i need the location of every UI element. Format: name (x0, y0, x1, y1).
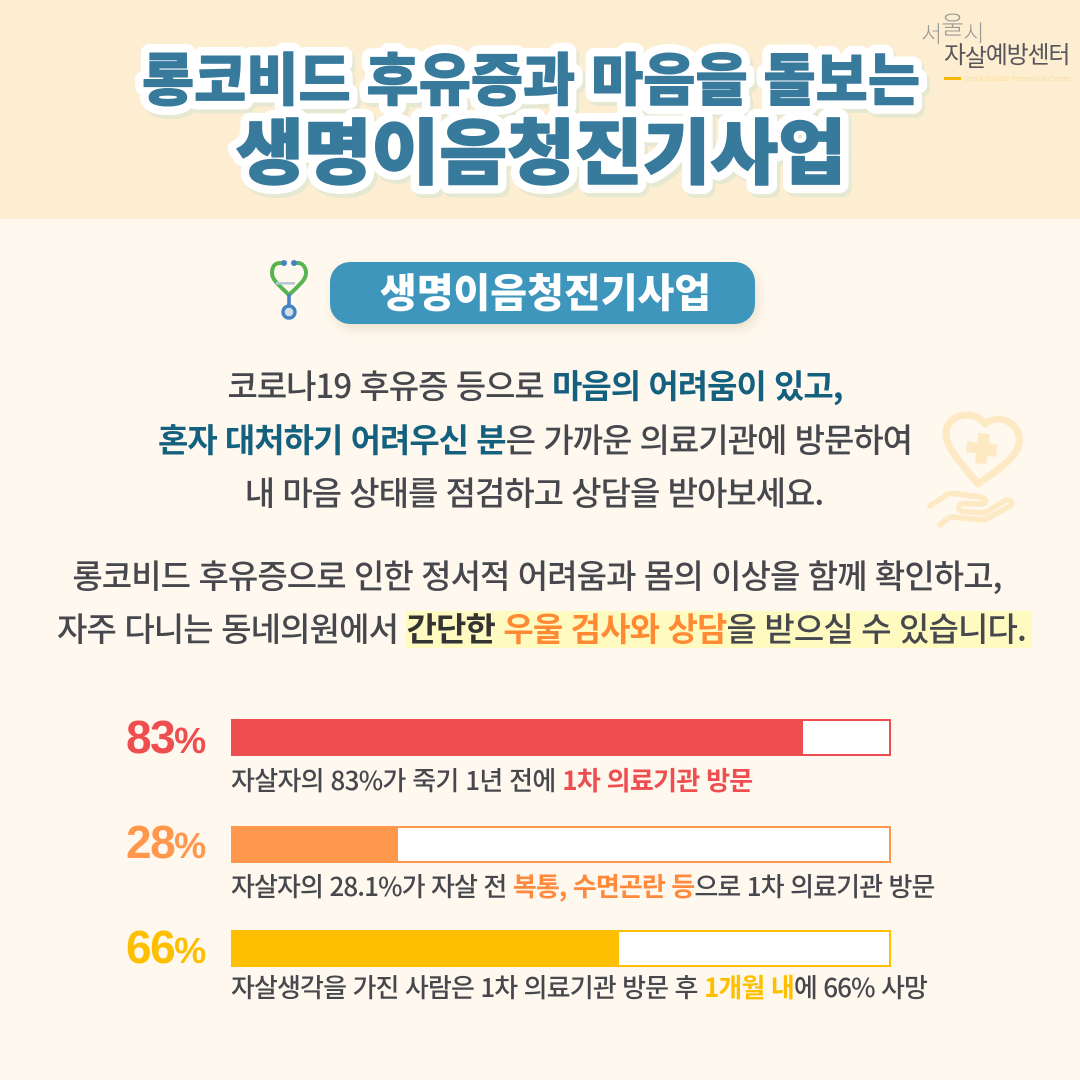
title: 생명이음청진기사업 (236, 97, 846, 199)
bar 28% (231, 826, 891, 863)
caption 83%: 자살자의 83%가 죽기 1년 전에 1차 의료기관 방문 (231, 761, 753, 798)
title: 롱코비드 후유증과 마음을 돌보는 (142, 35, 920, 117)
caption 66%: 자살생각을 가진 사람은 1차 의료기관 방문 후 1개월 내에 66% 사망 (231, 968, 927, 1005)
title: 롱코비드 후유증과 마음을 돌보는 (145, 39, 923, 121)
stat 83% (126, 711, 891, 798)
caption 28%: 자살자의 28.1%가 자살 전 복통, 수면곤란 등으로 1차 의료기관 방문 (231, 867, 935, 904)
paragraph 1 line 3: 내 마음 상태를 점검하고 상담을 받아보세요. (245, 467, 823, 515)
stat 66% (126, 921, 928, 1005)
section heading pill (330, 262, 755, 324)
logo: Seoul Suicide Prevention Center: 자살예방센터 (944, 35, 1069, 73)
value 66%: 66% (126, 921, 206, 973)
paragraph 2 line 1: 롱코비드 후유증으로 인한 정서적 어려움과 몸의 이상을 함께 확인하고, (72, 550, 1002, 598)
paragraph 1 line 1: 코로나19 후유증 등으로 마음의 어려움이 있고, (227, 360, 843, 408)
value 83%: 83% (126, 711, 206, 763)
title: 생명이음청진기사업 (236, 97, 846, 199)
logo: Seoul Suicide Prevention Center: Seoul Suicide Prevention Center (964, 74, 1071, 83)
title: 롱코비드 후유증과 마음을 돌보는 (142, 35, 920, 117)
bar 83% (231, 719, 891, 756)
header band (0, 0, 1080, 219)
icon: heart with cross over hand (927, 412, 1023, 528)
paragraph 2 line 2: 자주 다니는 동네의원에서 간단한 우울 검사와 상담을 받으실 수 있습니다. (57, 603, 1026, 651)
icon: stethoscope (270, 260, 308, 320)
logo: Seoul Suicide Prevention Center: 서울시 (921, 6, 983, 49)
value 28%: 28% (126, 816, 206, 868)
bar 66% (231, 930, 891, 967)
paragraph 1 line 2: 혼자 대처하기 어려우신 분은 가까운 의료기관에 방문하여 (158, 414, 912, 462)
stat 28% (126, 816, 935, 904)
title: 생명이음청진기사업 (239, 101, 849, 203)
highlight (406, 611, 1032, 648)
logo: Seoul Suicide Prevention Center (921, 6, 1071, 83)
title (135, 35, 930, 203)
section heading text: 생명이음청진기사업 (380, 261, 711, 319)
